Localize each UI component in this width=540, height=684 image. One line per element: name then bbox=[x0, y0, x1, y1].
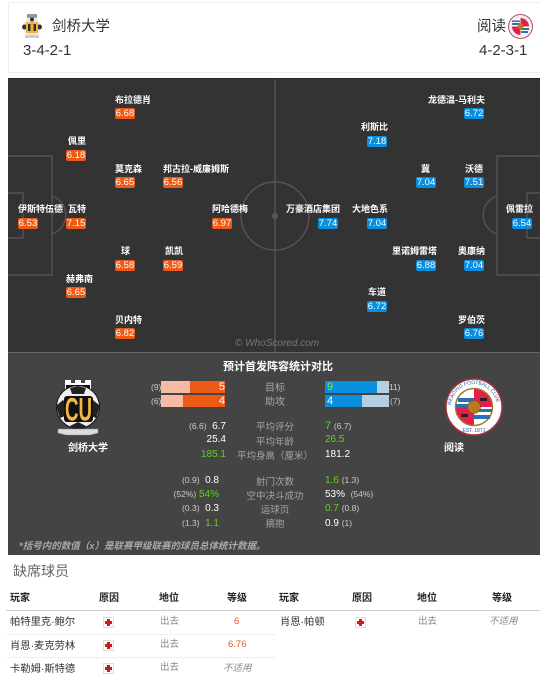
home players: 布拉德肖 bbox=[115, 95, 151, 105]
stat rows: away values: 53% (54%) bbox=[325, 489, 373, 500]
stat rows: labels: 空中决斗成功 bbox=[246, 491, 304, 502]
pitch markings bbox=[8, 79, 540, 352]
away players: 冀 bbox=[421, 164, 430, 174]
stat: assists away: (7) bbox=[390, 396, 400, 406]
away team name: 阅读 bbox=[477, 19, 506, 35]
stats footnote: *括号内的数值（x）是联赛甲级联赛的球员总体统计数据。 bbox=[19, 541, 265, 552]
player 莫克森 bbox=[115, 164, 142, 188]
away players: 奥康纳 bbox=[458, 246, 485, 256]
player 冀 bbox=[416, 164, 436, 188]
header row: 原因 bbox=[99, 593, 119, 604]
home players: 赫弗南 bbox=[66, 274, 93, 284]
row: 肖恩·麦克劳林: 出去 bbox=[160, 639, 179, 650]
away players: 罗伯茨 bbox=[458, 315, 485, 325]
player 球 bbox=[115, 246, 135, 271]
header row bbox=[10, 592, 247, 604]
row: 帕特里克·鲍尔: 帕特里克·鲍尔 bbox=[10, 617, 75, 628]
row: 肖恩·麦克劳林 bbox=[6, 635, 275, 658]
away players: 万豪酒店集团 bbox=[286, 204, 340, 214]
away formation: 4-2-3-1 bbox=[479, 42, 527, 59]
home players: 球 bbox=[121, 246, 130, 256]
player 万豪酒店集团 bbox=[286, 204, 340, 229]
home players: 6.59 bbox=[164, 260, 182, 271]
away players: 6.72 bbox=[465, 108, 483, 119]
stat rows: away values: 0.7 (0.8) bbox=[325, 503, 359, 514]
stat rows: labels: 射门次数 bbox=[256, 477, 294, 488]
watermark: © WhoScored.com bbox=[235, 338, 319, 349]
player 里诺姆雷塔 bbox=[392, 246, 437, 271]
player 伊斯特伍德 bbox=[18, 204, 63, 229]
stat: assists home: 4 bbox=[219, 395, 225, 407]
icon: Cambridge United crest bbox=[56, 380, 100, 436]
away players: 大地色系 bbox=[352, 204, 388, 214]
home players: 6.82 bbox=[116, 328, 134, 339]
away players: 龙德温-马利夫 bbox=[428, 95, 485, 105]
player 车道 bbox=[367, 287, 387, 312]
player 瓦特 bbox=[66, 204, 86, 229]
header row: 地位 bbox=[417, 593, 437, 604]
home team name: 剑桥大学 bbox=[52, 19, 110, 35]
home players: 6.53 bbox=[19, 218, 37, 229]
row: 帕特里克·鲍尔: 出去 bbox=[160, 616, 179, 627]
row: 卡勒姆·斯特德 bbox=[10, 662, 252, 675]
stat: goals home bbox=[151, 381, 225, 393]
away players: 6.76 bbox=[465, 328, 483, 339]
header row: 等级 bbox=[492, 593, 512, 604]
home players: 6.18 bbox=[67, 150, 85, 161]
icon: Reading FC crest: EST. 1871 bbox=[462, 428, 486, 434]
stats heading: 预计首发阵容统计对比 bbox=[223, 361, 333, 373]
stat rows: away values: 0.9 (1) bbox=[325, 518, 352, 529]
stat rows: home values bbox=[174, 421, 226, 529]
stat rows: home values: (6.6) 6.7 bbox=[189, 421, 226, 432]
home players: 邦古拉-威廉姆斯 bbox=[163, 164, 229, 174]
table: home missing players bbox=[6, 592, 275, 675]
home players: 7.15 bbox=[67, 218, 85, 229]
away players: 7.74 bbox=[319, 218, 337, 229]
away players bbox=[286, 95, 533, 339]
player 奥康纳 bbox=[458, 246, 485, 271]
stat rows: labels bbox=[237, 422, 313, 530]
row: 肖恩·麦克劳林: 6.76 bbox=[228, 639, 246, 650]
header row: 玩家 bbox=[10, 593, 30, 604]
stat rows: labels: 平均评分 bbox=[256, 422, 294, 433]
stat rows: home values: (0.9) 0.8 bbox=[182, 475, 219, 486]
stat rows: home values: (0.3) 0.3 bbox=[182, 503, 219, 514]
away crest label: 阅读 bbox=[444, 443, 464, 454]
home players: 6.68 bbox=[116, 108, 134, 119]
stat rows: away values: 1.6 (1.3) bbox=[325, 475, 359, 486]
away players: 7.51 bbox=[465, 177, 483, 188]
player 布拉德肖 bbox=[115, 94, 151, 119]
away players: 利斯比 bbox=[361, 122, 388, 132]
home players bbox=[18, 94, 248, 339]
stat: assists home: (6) bbox=[151, 396, 161, 406]
panel: lineup statistics bbox=[8, 352, 540, 555]
away players: 6.72 bbox=[368, 301, 386, 312]
away players: 车道 bbox=[368, 287, 386, 297]
home players: 阿哈德梅 bbox=[212, 204, 248, 214]
player 佩里 bbox=[66, 136, 86, 161]
stat rows: home values: 185.1 bbox=[201, 449, 226, 460]
stat rows: away values: 181.2 bbox=[325, 449, 350, 460]
player 阿哈德梅 bbox=[212, 204, 248, 229]
stat: goals home: 5 bbox=[219, 381, 225, 393]
stat: assists away bbox=[325, 395, 400, 407]
stat rows: away values: 7 (6.7) bbox=[325, 420, 351, 432]
row: 帕特里克·鲍尔 bbox=[6, 611, 275, 635]
away players: 沃德 bbox=[465, 164, 483, 174]
home players: 6.58 bbox=[116, 260, 134, 271]
away players: 7.04 bbox=[417, 177, 435, 188]
stat rows: home values: (52%) 54% bbox=[174, 489, 219, 500]
row: 肖恩·帕顿: 肖恩·帕顿 bbox=[280, 617, 325, 628]
stat rows: home values: 25.4 bbox=[207, 434, 226, 445]
row: 卡勒姆·斯特德: 出去 bbox=[160, 662, 179, 673]
away players: 6.54 bbox=[513, 218, 531, 229]
icon: Reading FC crest: READING FOOTBALL CLUB bbox=[448, 380, 500, 405]
player 贝内特 bbox=[115, 315, 142, 339]
row: 卡勒姆·斯特德: 不适用 bbox=[223, 663, 252, 674]
home crest label: 剑桥大学 bbox=[68, 443, 108, 454]
player 沃德 bbox=[464, 164, 484, 188]
header row: 原因 bbox=[352, 593, 372, 604]
stat rows: labels: 摘抱 bbox=[265, 519, 284, 530]
home formation: 3-4-2-1 bbox=[23, 42, 71, 59]
away players: 7.04 bbox=[368, 218, 386, 229]
icon: Reading FC crest bbox=[445, 378, 503, 436]
stat: assists away: 4 bbox=[327, 395, 333, 407]
away players: 里诺姆雷塔 bbox=[392, 246, 437, 256]
stat rows: labels: 平均身高（厘米） bbox=[237, 451, 313, 462]
home players: 伊斯特伍德 bbox=[18, 204, 63, 214]
header row: 玩家 bbox=[279, 593, 299, 604]
stat: assists label: 助攻 bbox=[265, 397, 285, 408]
stat rows: labels: 运球页 bbox=[261, 505, 289, 516]
home players: 瓦特 bbox=[68, 204, 86, 214]
row: 卡勒姆·斯特德: 卡勒姆·斯特德 bbox=[10, 664, 75, 675]
stat: goals home: (9) bbox=[151, 382, 161, 392]
player 佩雷拉 bbox=[506, 204, 533, 229]
header row: 等级 bbox=[227, 593, 247, 604]
stat rows: away values bbox=[325, 420, 373, 529]
stat: goals label: 目标 bbox=[265, 383, 285, 394]
home players: 莫克森 bbox=[115, 164, 142, 174]
stat: assists home bbox=[151, 395, 225, 407]
home players: 6.65 bbox=[67, 287, 85, 298]
away players: 7.04 bbox=[465, 260, 483, 271]
home players: 佩里 bbox=[68, 136, 86, 146]
row: 肖恩·帕顿: 不适用 bbox=[489, 616, 518, 627]
home players: 凯凯 bbox=[165, 246, 183, 256]
stat rows: away values: 26.5 bbox=[325, 434, 344, 445]
row: 肖恩·帕顿: 出去 bbox=[418, 616, 437, 627]
stat: goals away: (11) bbox=[386, 382, 400, 392]
icon: Cambridge small crest bbox=[22, 14, 42, 38]
heading: missing players: 缺席球员 bbox=[13, 563, 69, 579]
player 赫弗南 bbox=[66, 274, 93, 298]
row: 帕特里克·鲍尔: 6 bbox=[234, 616, 239, 627]
player 邦古拉-威廉姆斯 bbox=[163, 164, 229, 188]
player 龙德温-马利夫 bbox=[428, 95, 485, 119]
home players: 6.65 bbox=[116, 177, 134, 188]
stat rows: labels: 平均年龄 bbox=[256, 437, 294, 448]
stat: goals away: 9 bbox=[327, 381, 333, 393]
home players: 6.56 bbox=[164, 177, 182, 188]
header card bbox=[8, 2, 540, 73]
row: 肖恩·帕顿 bbox=[275, 611, 540, 634]
panel: pitch bbox=[8, 78, 540, 353]
away players: 6.88 bbox=[417, 260, 435, 271]
player 凯凯 bbox=[163, 246, 183, 271]
stat: goals away bbox=[325, 381, 400, 393]
away players: 佩雷拉 bbox=[506, 204, 533, 214]
player 大地色系 bbox=[352, 204, 388, 229]
table: away missing players bbox=[275, 592, 540, 628]
home players: 贝内特 bbox=[115, 315, 142, 325]
player 罗伯茨 bbox=[458, 315, 485, 339]
away players: 7.18 bbox=[368, 136, 386, 147]
stat rows: home values: (1.3) 1.1 bbox=[182, 518, 219, 529]
home players: 6.97 bbox=[213, 218, 231, 229]
icon: Reading small crest bbox=[508, 14, 533, 39]
header row: 地位 bbox=[159, 593, 179, 604]
header row bbox=[275, 592, 540, 611]
player 利斯比 bbox=[361, 122, 388, 147]
row: 肖恩·麦克劳林: 肖恩·麦克劳林 bbox=[10, 641, 75, 652]
